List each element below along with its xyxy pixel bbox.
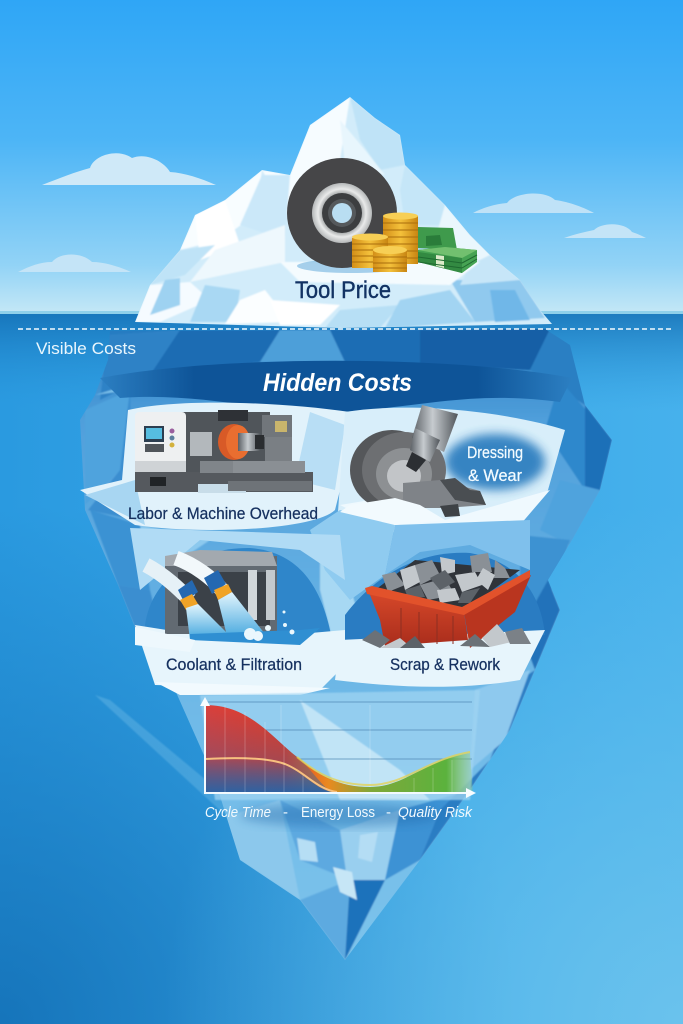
panel: hidden costs band — [100, 361, 572, 412]
chart axes — [204, 702, 472, 793]
label: visible costs: Visible Costs — [36, 339, 136, 358]
icon: scrap bin — [362, 553, 531, 648]
arrow: x axis — [466, 788, 476, 798]
label: coolant and filtration: Coolant & Filtration — [166, 655, 302, 674]
arrow: y axis — [200, 697, 210, 706]
chart separator: - — [283, 804, 288, 821]
cloud: lower right — [564, 224, 646, 238]
divider: visible line — [18, 328, 672, 330]
icon: dressing wheel and tool — [340, 405, 486, 525]
cloud: small left — [18, 254, 131, 272]
label: dressing and wear: Dressing — [467, 443, 523, 462]
label: dressing and wear: & Wear — [468, 466, 522, 485]
heading: tool price: Tool Price — [295, 277, 391, 304]
ice between panels — [130, 510, 530, 600]
icon: cnc machine — [135, 410, 313, 493]
chart label: cycle time: Cycle Time — [205, 804, 271, 821]
panel: labor and machine — [80, 403, 350, 530]
iceberg: above water — [130, 95, 560, 330]
icon: coin stacks — [352, 212, 418, 272]
label: scrap and rework: Scrap & Rework — [390, 655, 500, 674]
chart label: energy loss: Energy Loss — [301, 804, 375, 821]
cloud: large left — [42, 153, 216, 185]
icon: banknotes — [418, 227, 477, 273]
chart label: quality risk: Quality Risk — [398, 804, 473, 821]
label shadow — [240, 803, 440, 827]
cloud: upper right — [473, 194, 594, 213]
panel: coolant cave — [135, 548, 360, 690]
chart: costs curve — [200, 697, 476, 798]
sky background — [0, 0, 683, 312]
icon: coolant hoses and filter — [135, 550, 320, 652]
water — [0, 311, 683, 1024]
chart separator: - — [386, 804, 391, 821]
heading: hidden costs: Hidden Costs — [263, 369, 412, 397]
lower ice shelf — [155, 682, 480, 800]
panel: dressing and wear — [338, 408, 565, 535]
label: labor and machine overhead: Labor & Machine Overhead — [128, 504, 318, 523]
panel: scrap cave — [335, 553, 545, 687]
iceberg: underwater body — [70, 325, 620, 965]
icon: grinding wheel — [287, 158, 407, 273]
